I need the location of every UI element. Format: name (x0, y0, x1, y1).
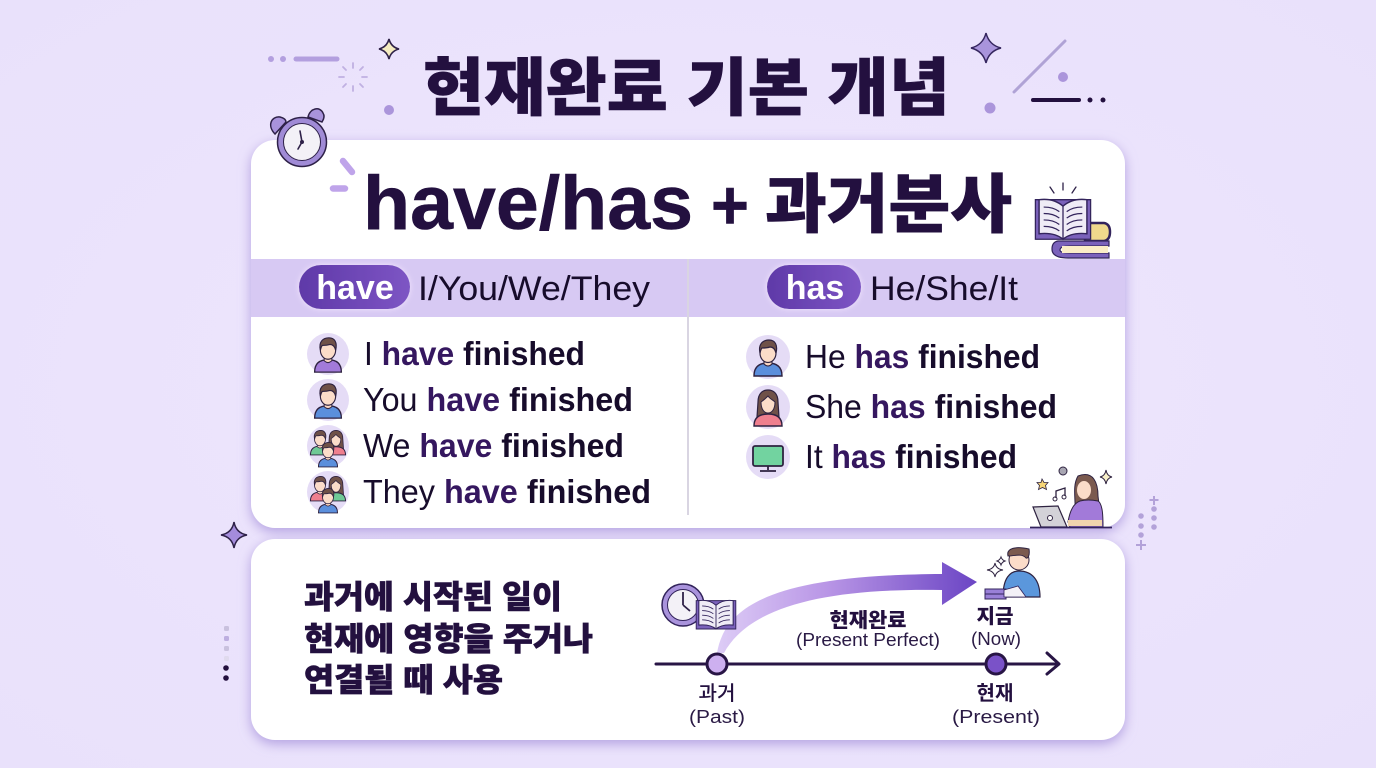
usage description (304, 572, 593, 701)
row: It has finished (746, 435, 1017, 479)
formula heading: 과거분사 (765, 154, 1012, 246)
usage description: 현재에 영향을 주거나 (304, 614, 593, 660)
row: She has finished (746, 385, 1057, 429)
label: present (952, 677, 1040, 727)
icon: alarm clock (271, 109, 326, 166)
decoration: motion dashes (333, 161, 352, 188)
usage description: 과거에 시작된 일이 (304, 572, 562, 618)
icon: yellow sparkle (379, 39, 399, 59)
past point (707, 654, 727, 674)
row: He has finished (746, 335, 1040, 379)
label: present perfect: (Present Perfect) (796, 630, 940, 650)
decoration: right dots and plus signs (1136, 496, 1158, 550)
label: past (689, 677, 745, 727)
label: present: (Present) (952, 707, 1040, 727)
label: past: 과거 (698, 677, 736, 706)
label: now (971, 600, 1021, 649)
row: It has finished: It has finished (805, 438, 1017, 475)
panel: formula and conjugation (251, 140, 1125, 528)
row: We have finished: We have finished (363, 427, 624, 464)
row: You have finished: You have finished (363, 381, 633, 418)
left header: have (299, 265, 650, 309)
row: She has finished: She has finished (805, 388, 1057, 425)
icon: left sparkle (221, 522, 247, 548)
header band (251, 259, 1125, 317)
panel: usage and timeline (251, 539, 1125, 740)
icon: open book on stacked books (1035, 183, 1110, 258)
formula heading: have/has (363, 161, 693, 246)
row: I have finished (307, 333, 585, 375)
label: present: 현재 (976, 677, 1014, 706)
row: I have finished: I have finished (364, 335, 585, 372)
formula heading (363, 154, 1012, 246)
row: They have finished: They have finished (363, 473, 651, 510)
right header: has: He/She/It (870, 270, 1019, 308)
timeline axis (656, 653, 1059, 674)
illustration: woman with laptop (1030, 467, 1112, 528)
curved arrow (717, 562, 977, 653)
left header: have: I/You/We/They (418, 270, 650, 308)
label: now: (Now) (971, 629, 1021, 649)
label: present perfect: 현재완료 (830, 604, 906, 633)
title: 현재완료 기본 개념 (423, 38, 950, 129)
left header: have: have (316, 269, 394, 307)
illustration: man at desk (985, 548, 1040, 599)
label: now: 지금 (976, 600, 1014, 629)
right header: has (767, 265, 1019, 309)
decoration: top left dots and ticks (268, 56, 394, 115)
decoration: left dots (223, 626, 229, 681)
label: past: (Past) (689, 707, 745, 727)
right header: has: has (786, 269, 844, 307)
usage description: 연결될 때 사용 (304, 655, 503, 701)
column divider (687, 259, 689, 515)
formula heading: + (711, 166, 749, 244)
present point (986, 654, 1006, 674)
icon: clock and book (662, 584, 736, 629)
row: He has finished: He has finished (805, 338, 1040, 375)
label: present perfect (796, 604, 940, 650)
decoration: top right sparkle, lines and dots (971, 33, 1106, 114)
